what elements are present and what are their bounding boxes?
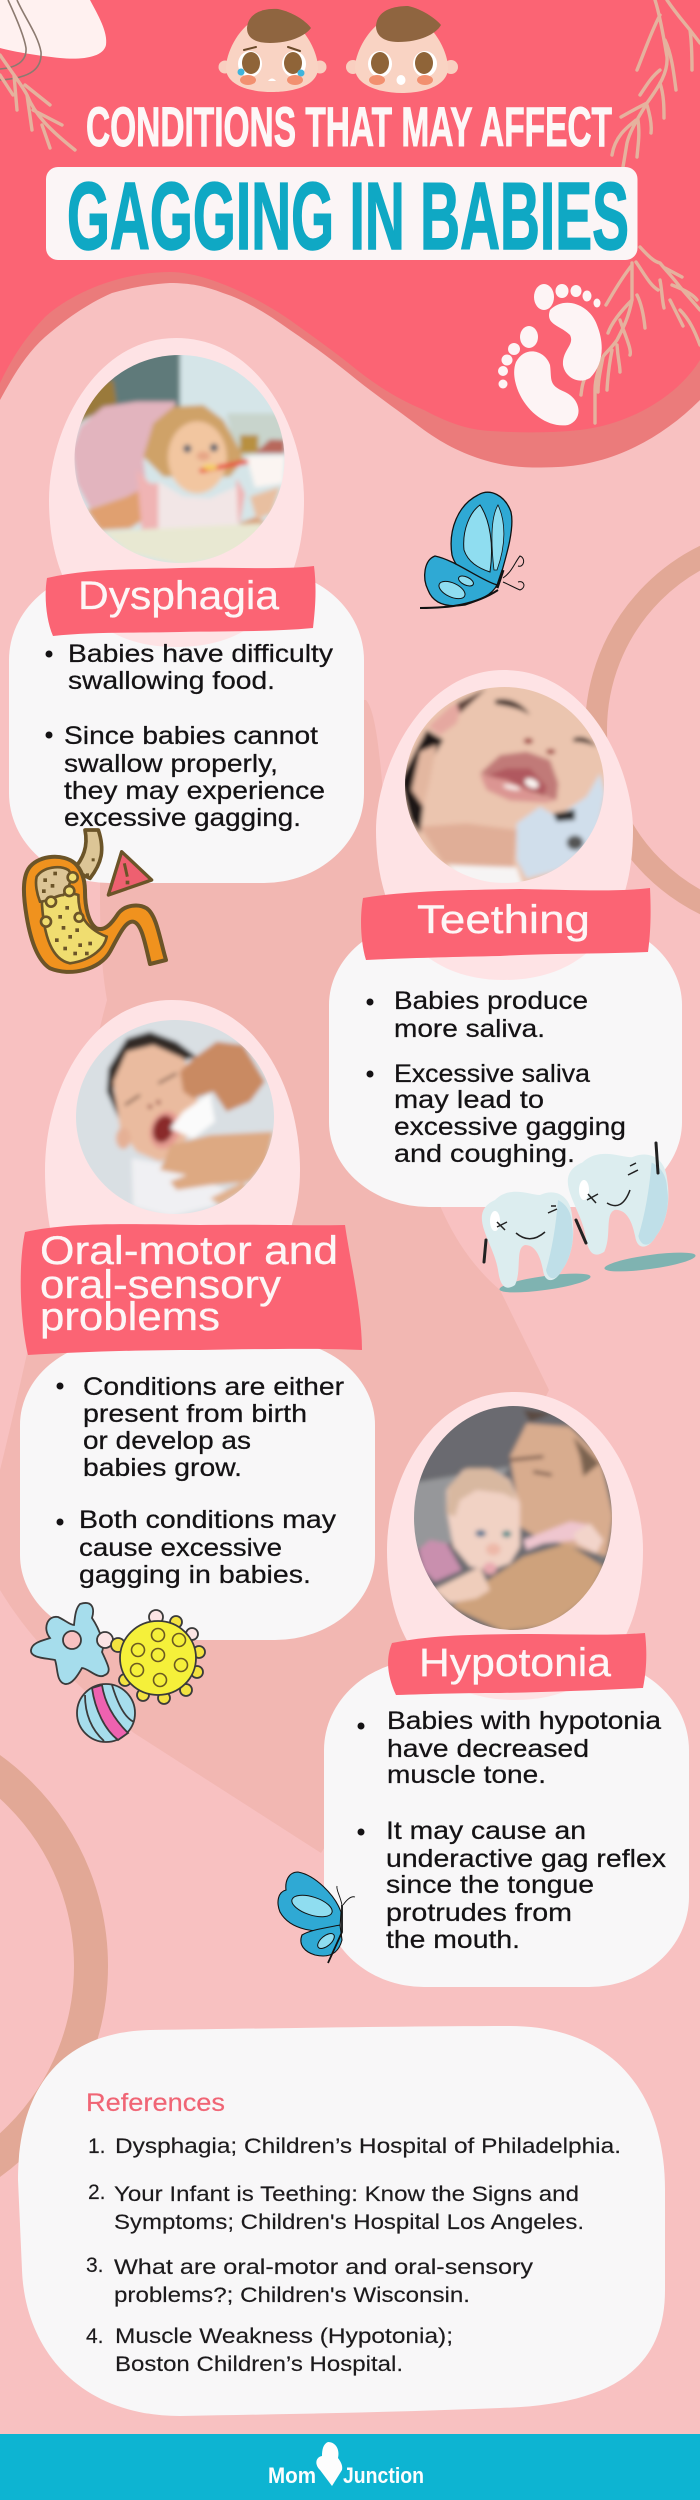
bullet text: more saliva. (394, 1015, 545, 1043)
top-left grey lines (0, 0, 41, 80)
egg frame (45, 1000, 300, 1290)
background ring left (0, 1723, 91, 2209)
references list: Your Infant is Teething: Know the Signs and (114, 2183, 579, 2206)
background darker band (0, 700, 549, 1853)
references list: Muscle Weakness (Hypotonia); (115, 2325, 453, 2348)
references list: Boston Children’s Hospital. (115, 2353, 403, 2376)
header wave pink (0, 283, 700, 560)
bullet text (46, 640, 334, 832)
panel body (329, 920, 682, 1207)
bullet text (366, 987, 626, 1168)
bullet text: Babies with hypotonia (387, 1707, 661, 1735)
icon: blue butterfly lower (278, 1872, 355, 1963)
photo: laughing teething baby (405, 687, 604, 883)
bullet text: babies grow. (83, 1454, 242, 1482)
heading banner: Oral-motor and (40, 1229, 338, 1273)
bullet text: Since babies cannot (64, 722, 318, 750)
icon: baby footprints (498, 284, 602, 425)
panel: hypotonia (324, 1392, 689, 1987)
bullet text: swallowing food. (68, 667, 275, 695)
panel body (9, 570, 364, 883)
heading banner: Hypotonia (419, 1641, 612, 1685)
bullet text: Excessive saliva (394, 1060, 590, 1088)
heading banner: Teething (417, 898, 590, 942)
panel: dysphagia (9, 338, 364, 883)
bullet text: Babies have difficulty (68, 640, 334, 668)
icon: surprised baby head (346, 6, 458, 93)
references list (86, 2135, 621, 2376)
heading banner: Dysphagia (78, 574, 280, 618)
blue teether (31, 1603, 109, 1684)
logo: Mom (268, 2463, 316, 2488)
egg frame (376, 670, 633, 980)
egg frame (49, 338, 304, 647)
bullet text: Conditions are either (83, 1373, 344, 1401)
photo: crying baby mouth wiped (76, 1020, 274, 1214)
heading banner (46, 566, 316, 636)
branch top-right (612, 0, 700, 167)
logo (268, 2442, 424, 2488)
icon: baby toys (31, 1603, 205, 1742)
bullet text: or develop as (83, 1427, 251, 1455)
icon: smiling teeth (482, 1143, 697, 1296)
bullet text (358, 1707, 667, 1954)
references list: 4. (86, 2325, 104, 2348)
bullet text: Both conditions may (79, 1506, 337, 1534)
heading banner (361, 888, 651, 960)
icon: blue butterfly upper (420, 492, 524, 608)
icon: stomach (24, 830, 166, 972)
icon: sad baby head (218, 9, 326, 92)
egg frame (387, 1392, 643, 1700)
heading banner: problems (40, 1295, 220, 1339)
bullet text: gagging in babies. (79, 1561, 311, 1589)
panel: oral-motor (20, 1000, 375, 1640)
bullet text (56, 1373, 344, 1589)
references list: Dysphagia; Children’s Hospital of Philadelphia. (115, 2135, 621, 2158)
bullet text: the mouth. (386, 1926, 520, 1954)
references list: 2. (88, 2181, 106, 2204)
footer bar (0, 2434, 700, 2500)
yellow ball (111, 1610, 205, 1704)
bullet text: protrudes from (386, 1899, 572, 1927)
header red area (0, 0, 700, 560)
bullet text: may lead to (394, 1086, 544, 1114)
logo: Junction (343, 2463, 424, 2488)
heading banner: oral-sensory (40, 1263, 281, 1307)
heading banner (388, 1633, 646, 1695)
references list: 3. (86, 2254, 104, 2277)
bullet text: It may cause an (386, 1817, 586, 1845)
bullet text: Babies produce (394, 987, 588, 1015)
bullet text: cause excessive (79, 1534, 282, 1562)
references heading: References (86, 2089, 225, 2117)
warning triangle (108, 852, 152, 895)
references list: Symptoms; Children's Hospital Los Angeles. (114, 2211, 584, 2234)
top-left white blob (0, 0, 106, 59)
bullet text: have decreased (387, 1735, 589, 1763)
panel: teething (329, 670, 682, 1207)
panel body (20, 1340, 375, 1640)
branch top-left (0, 55, 75, 150)
panel: references (18, 2026, 665, 2416)
bullet text: excessive gagging. (64, 804, 301, 832)
references list: 1. (88, 2135, 106, 2158)
bullet text: they may experience (64, 777, 325, 805)
branch mid-right (581, 247, 700, 423)
photo: baby being spoon fed (70, 350, 290, 570)
bullet text: muscle tone. (387, 1761, 546, 1789)
bullet text: and coughing. (394, 1140, 575, 1168)
references list: problems?; Children's Wisconsin. (114, 2284, 470, 2307)
bullet text: underactive gag reflex (386, 1845, 667, 1873)
striped ball (77, 1684, 135, 1742)
references list: What are oral-motor and oral-sensory (114, 2256, 534, 2279)
bullet text: excessive gagging (394, 1113, 626, 1141)
heading banner (21, 1224, 362, 1355)
photo: father holding baby (414, 1406, 612, 1630)
background ring right (596, 536, 700, 924)
bullet text: present from birth (83, 1400, 307, 1428)
bullet text: swallow properly, (64, 750, 278, 778)
header wave dark edge (0, 272, 700, 500)
bullet text: since the tongue (386, 1871, 594, 1899)
panel body (324, 1660, 689, 1987)
